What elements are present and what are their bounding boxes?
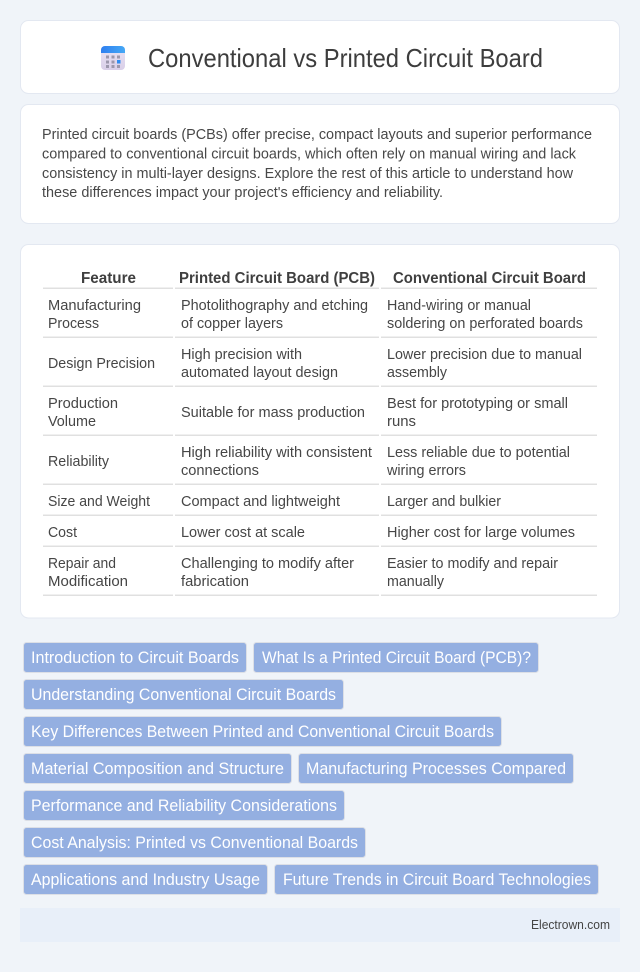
row: repair and modification: fabrication (181, 574, 249, 590)
row: size and weight: Compact and lightweight (181, 494, 340, 510)
row: production volume: Best for prototyping or small (387, 396, 568, 412)
row: design precision: assembly (387, 365, 448, 381)
row: reliability: wiring errors (386, 463, 466, 479)
row: size and weight: Size and Weight (48, 494, 150, 510)
tag: performance and reliability (24, 790, 344, 820)
row: production volume: Production (48, 396, 118, 412)
table rules (43, 288, 597, 596)
tag: future trends: Future Trends in Circuit Board Technologies (283, 871, 591, 889)
row: repair and modification: Challenging to modify after (181, 556, 354, 572)
row: production volume: Suitable for mass production (181, 405, 365, 421)
intro text: compared to conventional circuit boards, which often rely on manual wiring and lack (42, 146, 577, 162)
row: manufacturing process: soldering on perforated boards (387, 316, 583, 332)
tag: cost analysis: Cost Analysis: Printed vs Conventional Boards (31, 834, 358, 852)
row: repair and modification: Repair and (48, 556, 116, 572)
table header: Feature (81, 270, 136, 287)
intro text: consistency in multi-layer designs. Explore the rest of this article to understand how (42, 166, 573, 182)
tag: introduction: Introduction to Circuit Boards (31, 649, 239, 667)
row: reliability: High reliability with consistent (181, 445, 372, 461)
row: size and weight: Larger and bulkier (387, 494, 501, 510)
tag: key differences (24, 716, 502, 746)
row: repair and modification: manually (387, 574, 445, 590)
tag: understanding conventional (24, 680, 344, 710)
row: manufacturing process: of copper layers (181, 316, 283, 332)
row: repair and modification: Modification (48, 574, 128, 590)
row: reliability (48, 445, 570, 479)
tag: introduction (24, 642, 246, 672)
footer (20, 908, 620, 942)
intro text: Printed circuit boards (PCBs) offer precise, compact layouts and superior performance (42, 127, 592, 143)
row: cost: Higher cost for large volumes (387, 525, 575, 541)
icon: calendar grid (101, 46, 125, 70)
row: manufacturing process (48, 298, 583, 332)
table header (81, 270, 586, 287)
row: design precision: High precision with (181, 347, 302, 363)
tag: understanding conventional: Understanding Conventional Circuit Boards (31, 686, 336, 704)
tag: material composition: Material Composition and Structure (31, 760, 284, 778)
row: production volume: runs (387, 414, 416, 430)
tag: what is a pcb: What Is a Printed Circuit Board (PCB)? (262, 649, 531, 667)
panel: header card (20, 20, 620, 94)
row: manufacturing process: Hand-wiring or manual (387, 298, 531, 314)
row: manufacturing process: Photolithography and etching (181, 298, 368, 314)
panel: comparison table (20, 244, 620, 618)
row: repair and modification: Easier to modify and repair (387, 556, 558, 572)
panel: intro (20, 104, 620, 224)
tag: future trends (274, 864, 598, 894)
row: design precision: automated layout design (181, 365, 338, 381)
tag: applications (24, 864, 268, 894)
table header: Conventional Circuit Board (393, 270, 586, 287)
tag: performance and reliability: Performance and Reliability Considerations (31, 797, 337, 815)
row: cost (48, 525, 575, 541)
intro text: these differences impact your project's efficiency and reliability. (42, 185, 443, 201)
tag: cost analysis (24, 828, 366, 858)
tag: what is a pcb (254, 642, 538, 672)
row: design precision: Lower precision due to manual (387, 347, 582, 363)
tag: manufacturing processes (298, 754, 574, 784)
tag: key differences: Key Differences Between Printed and Conventional Circuit Boards (31, 723, 494, 741)
row: design precision (48, 347, 582, 381)
tag: applications: Applications and Industry Usage (31, 871, 260, 889)
intro text (42, 127, 592, 201)
row: production volume (48, 396, 568, 430)
row: reliability: connections (181, 463, 259, 479)
table header: Printed Circuit Board (PCB) (179, 270, 375, 287)
row: reliability: Less reliable due to potential (387, 445, 570, 461)
row: design precision: Design Precision (48, 356, 155, 372)
row: manufacturing process: Manufacturing (48, 298, 141, 314)
row: manufacturing process: Process (48, 316, 99, 332)
tag: material composition (24, 754, 292, 784)
row: cost: Lower cost at scale (181, 525, 305, 541)
row: reliability: Reliability (48, 454, 110, 470)
row: production volume: Volume (48, 414, 96, 430)
row: size and weight (48, 494, 501, 510)
title: Conventional vs Printed Circuit Board (148, 43, 543, 73)
tag: manufacturing processes: Manufacturing Processes Compared (306, 760, 566, 778)
row: repair and modification (48, 556, 558, 590)
footer: Electrown.com (531, 918, 610, 932)
row: cost: Cost (48, 525, 77, 541)
